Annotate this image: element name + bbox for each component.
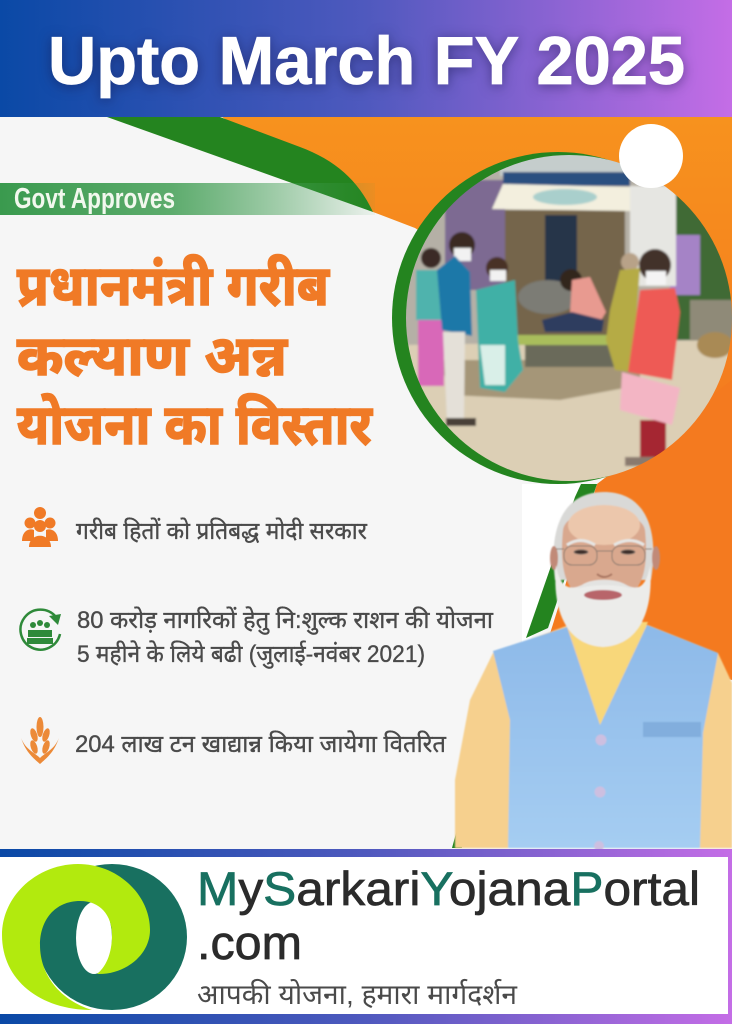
logo ring	[2, 864, 187, 1010]
top header band	[0, 0, 732, 117]
bullet three	[21, 717, 447, 764]
logo wordmark: MySarkariYojanaPortal	[197, 862, 700, 915]
face	[562, 511, 646, 595]
icon: green cycle with people	[20, 610, 61, 650]
title: Upto March FY 2025	[48, 23, 685, 99]
kurta	[455, 625, 732, 848]
beard	[555, 565, 651, 647]
bullet one: गरीब हितों को प्रतिबद्ध मोदी सरकार	[76, 517, 368, 545]
page background	[0, 117, 732, 850]
forehead	[568, 505, 640, 545]
Govt Approves banner: Govt Approves	[14, 183, 175, 215]
bullet two	[20, 606, 494, 669]
bullet two: 5 महीने के लिये बढी (जुलाई-नवंबर 2021)	[77, 640, 425, 669]
bullet one	[22, 507, 368, 547]
photo sky and buildings	[400, 150, 732, 350]
green stripe at lower portrait	[452, 826, 462, 848]
footer panel: .com	[197, 916, 302, 969]
Govt Approves banner	[0, 183, 375, 215]
photo man in blue shirt	[437, 232, 476, 426]
photo seated man	[542, 269, 606, 332]
logo tagline: आपकी योजना, हमारा मार्गदर्शन	[197, 978, 517, 1010]
collar	[567, 622, 648, 725]
footer panel	[0, 849, 732, 1024]
photo girl in red	[620, 249, 680, 466]
white circle accent	[619, 124, 683, 188]
orange backdrop right	[548, 380, 732, 680]
photo truck	[492, 172, 676, 367]
mustache and mouth	[577, 580, 632, 600]
vest	[493, 625, 718, 848]
icon: wheat	[21, 717, 59, 764]
main Hindi heading: योजना का विस्तार	[17, 393, 373, 456]
photo woman in teal saree	[476, 257, 523, 392]
circular photo with green ring	[392, 150, 732, 490]
main Hindi heading: कल्याण अन्न	[17, 324, 288, 387]
glasses and eyes	[556, 540, 652, 577]
photo basket	[697, 332, 732, 358]
main Hindi heading	[17, 254, 373, 456]
photo woman in olive saree	[606, 253, 640, 372]
photo ground	[408, 339, 699, 351]
green swoosh	[107, 117, 373, 212]
bullet two: 80 करोड़ नागरिकों हेतु नि:शुल्क राशन की योजना	[77, 606, 494, 635]
ears	[550, 546, 660, 570]
photo truck shadow	[440, 360, 640, 400]
vest buttons	[594, 734, 606, 851]
white stripe behind portrait	[522, 484, 597, 660]
portrait of the Prime Minister	[455, 492, 732, 851]
photo woman in pink	[416, 248, 444, 386]
green stripe beside portrait	[526, 484, 597, 638]
icon: people group	[22, 507, 58, 547]
vest pocket	[643, 722, 701, 737]
hair	[553, 492, 653, 580]
bullet three: 204 लाख टन खाद्यान्न किया जायेगा वितरित	[75, 730, 447, 758]
orange backdrop top	[222, 117, 732, 430]
main Hindi heading: प्रधानमंत्री गरीब	[17, 254, 330, 317]
